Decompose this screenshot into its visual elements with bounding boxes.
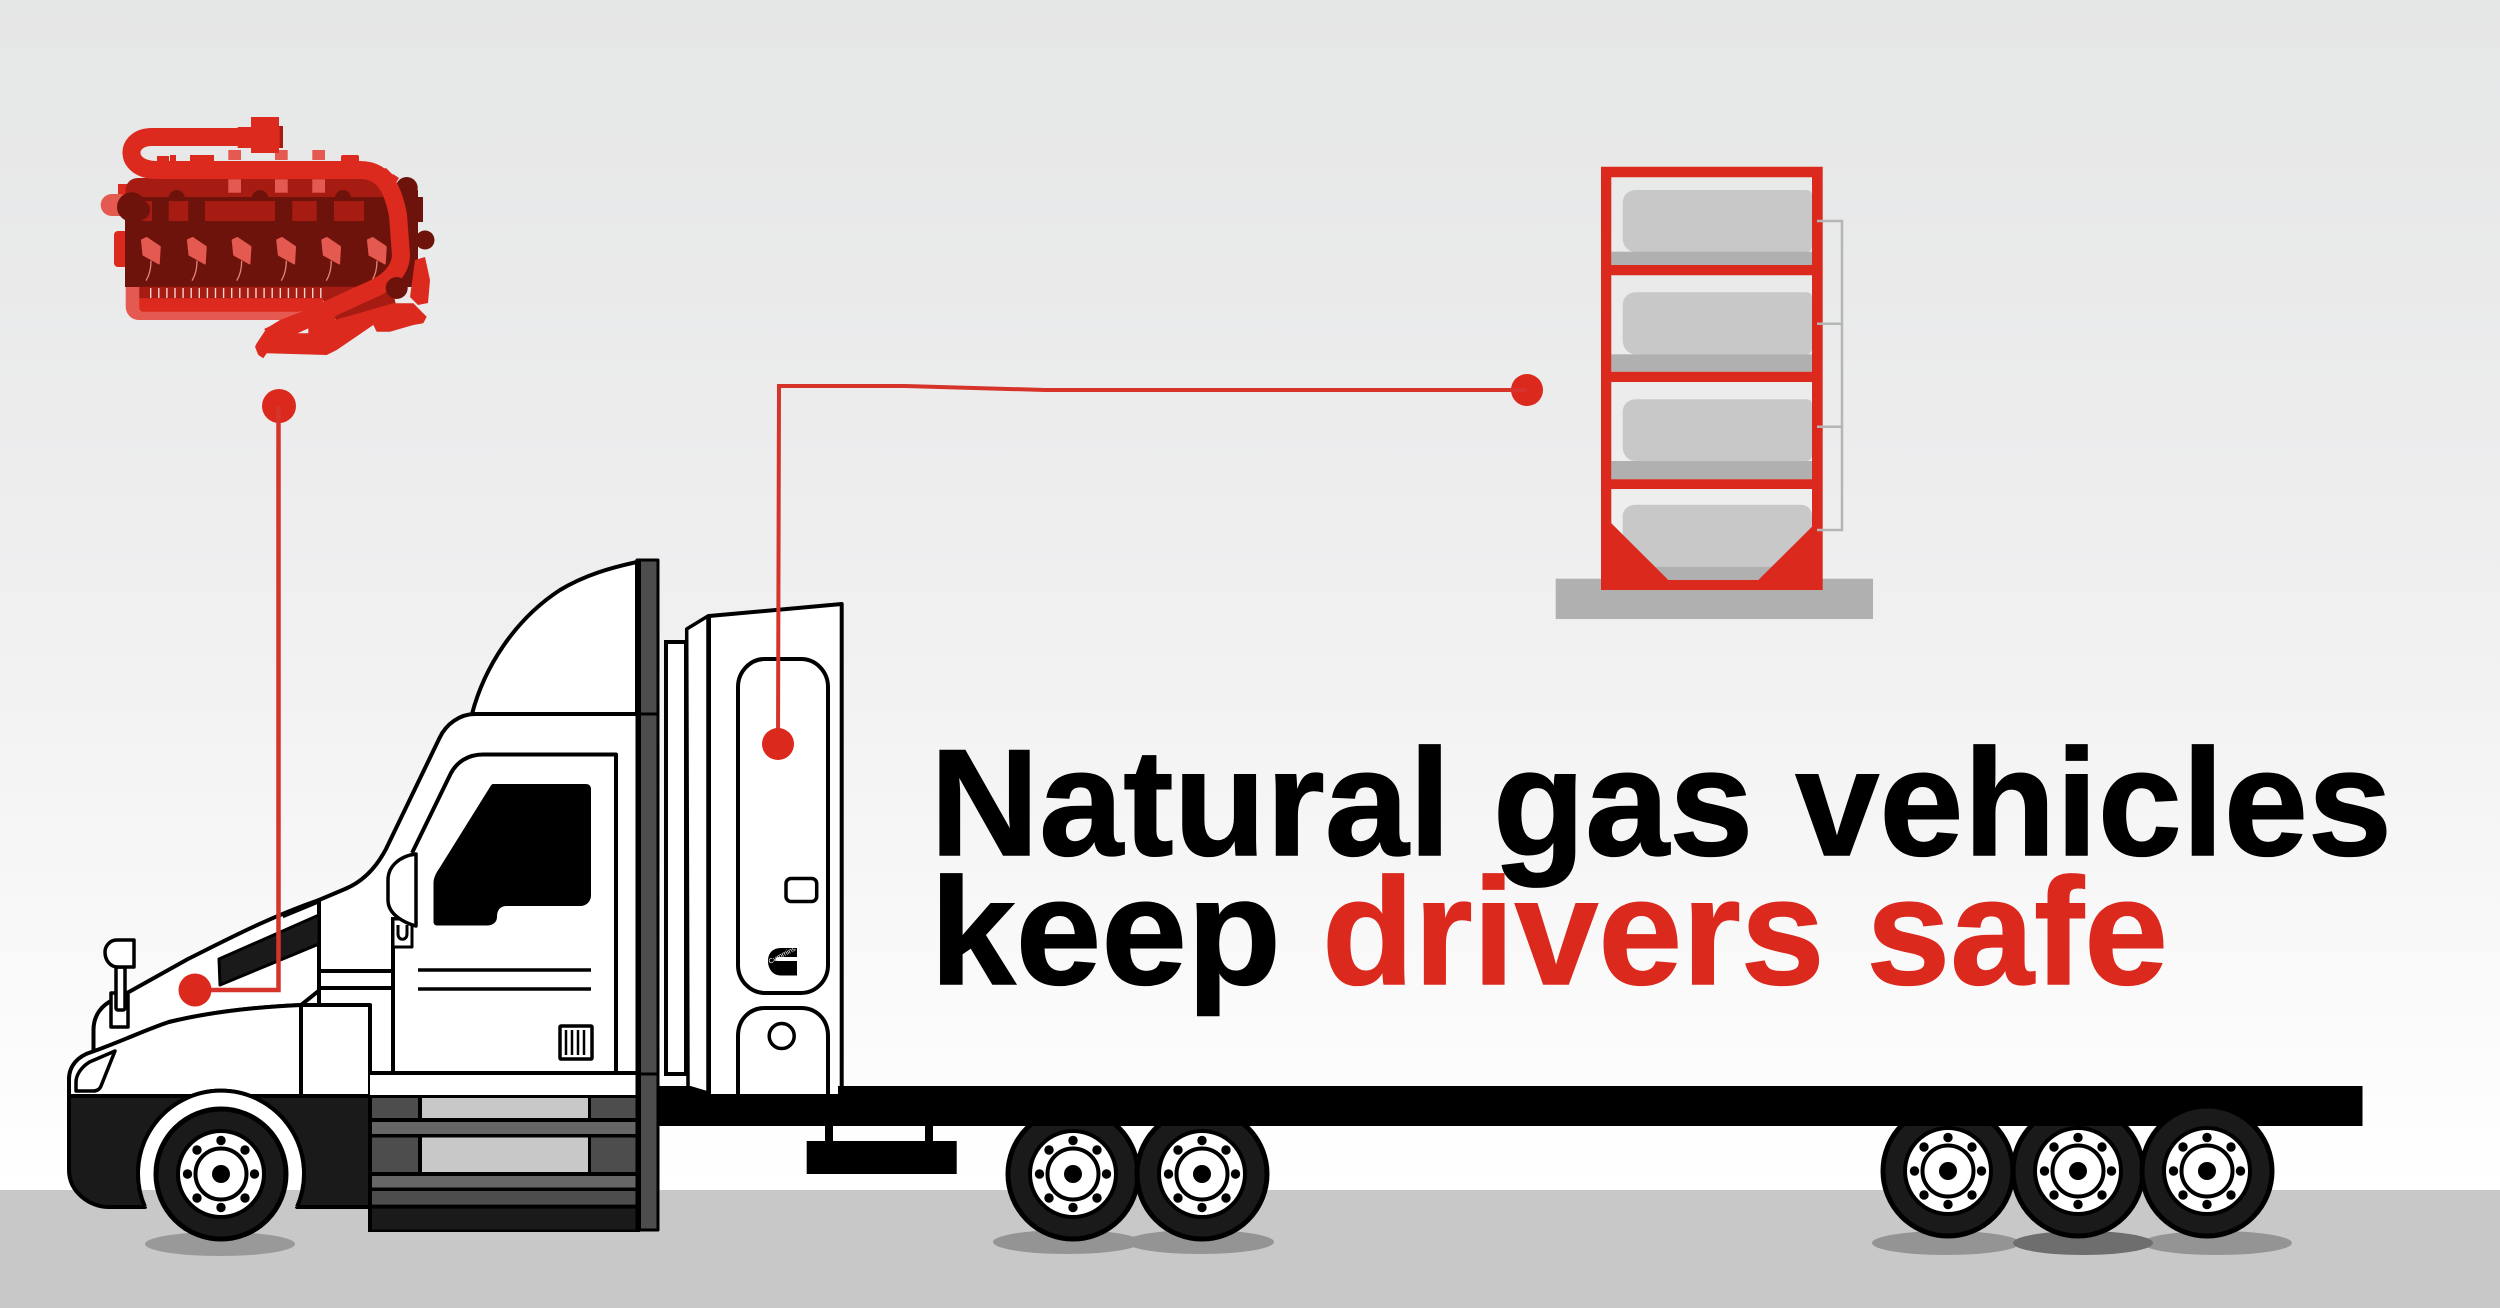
rack base — [1556, 579, 1873, 619]
door lines — [418, 970, 591, 989]
rear wheel in front of frame — [2142, 1106, 2272, 1236]
engine left lobes — [114, 184, 128, 267]
lower panel — [738, 1008, 828, 1094]
fuel tank rack — [1556, 167, 1873, 619]
trailer wheels, first pair — [1008, 1109, 1267, 1239]
hood — [94, 900, 319, 1054]
engine comb — [139, 287, 396, 322]
upper panel — [738, 659, 828, 993]
engine icon — [101, 117, 434, 358]
title line 2 red: drivers safe — [1322, 847, 2168, 1017]
title — [930, 718, 2392, 1017]
engine valve cover rectangles — [142, 201, 364, 221]
side bars — [319, 971, 392, 988]
front wheel — [156, 1109, 286, 1239]
Cummins logo — [768, 945, 797, 976]
door — [393, 754, 616, 1073]
dot: hood — [178, 974, 212, 1006]
title line 2: keep — [930, 847, 1281, 1017]
engine base tray — [126, 286, 300, 320]
lower panel cap — [769, 1024, 794, 1048]
wheel shadows — [145, 1230, 2292, 1256]
roof fairing — [472, 562, 637, 714]
engine injectors — [142, 238, 386, 281]
engine light tabs — [228, 150, 325, 193]
hood vent — [219, 903, 319, 985]
rack bracket — [1817, 221, 1842, 530]
arch cut-out for ground — [138, 1091, 304, 1207]
tanks — [1623, 190, 1812, 567]
Cummins logo: Cummins — [768, 945, 797, 966]
cab body — [319, 714, 640, 1096]
headlight — [76, 1051, 115, 1091]
connector line: tank to rack — [778, 386, 1527, 744]
slanted panel — [687, 616, 708, 1093]
door window — [434, 784, 591, 926]
door grille — [560, 1026, 592, 1059]
sill — [370, 1071, 640, 1075]
fuel tank cabinet — [666, 604, 842, 1094]
engine exhaust — [255, 303, 427, 358]
rack frame — [1601, 167, 1823, 590]
bumper with wheel arch — [69, 1091, 370, 1207]
rear box — [666, 642, 686, 1074]
title line 1: Natural gas vehicles — [930, 718, 2392, 888]
rear wheels, covered by frame — [1883, 1106, 2143, 1236]
engine right side — [390, 177, 434, 287]
dot: tank rack — [1511, 374, 1543, 406]
hood mirror — [105, 940, 134, 1027]
tank shelves — [1611, 252, 1812, 580]
connector line: engine to hood — [195, 406, 278, 990]
door mirror — [388, 854, 416, 947]
steps — [368, 1075, 640, 1232]
cab rear pillar — [637, 560, 658, 1230]
engine pipe connector — [238, 117, 283, 153]
main cover — [709, 604, 842, 1094]
engine coolant pipe — [131, 137, 401, 337]
truck cab — [69, 560, 658, 1239]
dot: engine — [262, 389, 296, 423]
engine block — [125, 196, 393, 287]
fender — [69, 1005, 370, 1096]
panel latch — [786, 878, 817, 902]
dot: tank — [762, 728, 794, 760]
trailer frame — [640, 1086, 2362, 1174]
road — [0, 1190, 2500, 1308]
